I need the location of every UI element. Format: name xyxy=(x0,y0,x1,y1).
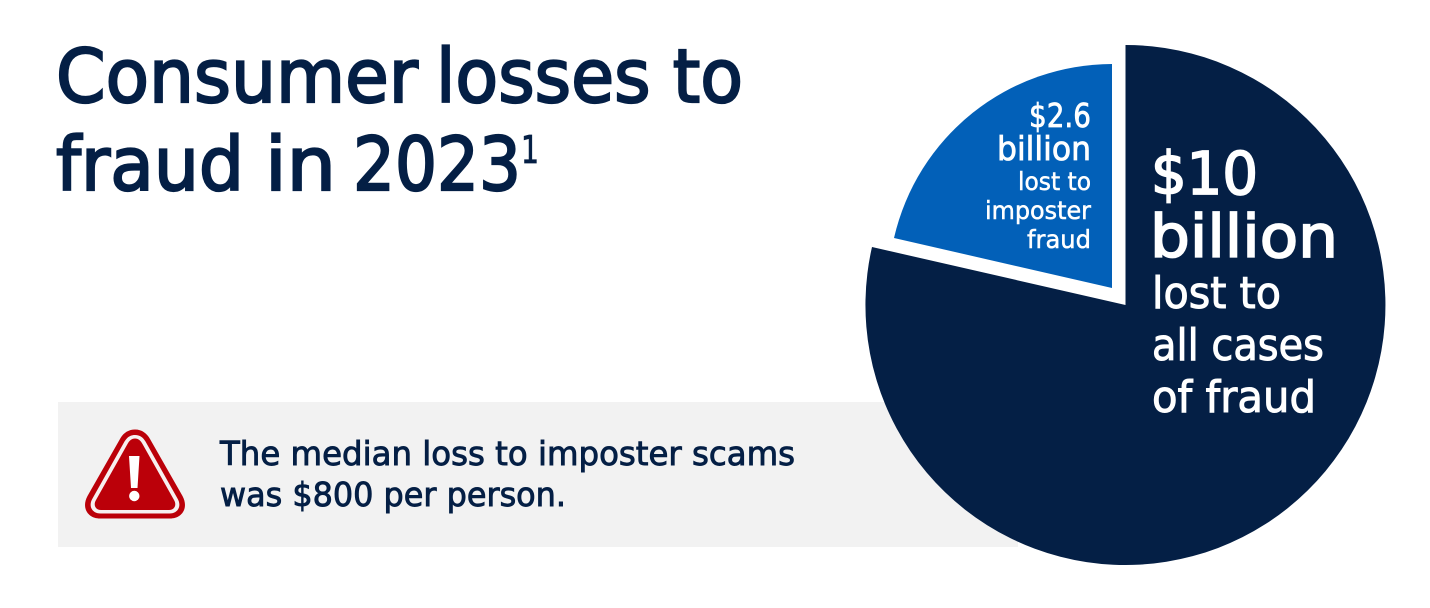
pie slice: imposter fraud xyxy=(894,64,1112,288)
label: all fraud: lost to xyxy=(1152,268,1281,319)
title xyxy=(56,34,743,208)
label: imposter fraud: billion xyxy=(997,129,1091,168)
label: all fraud: $10 xyxy=(1151,139,1258,208)
title: losses to xyxy=(436,34,743,120)
panel: median loss callout xyxy=(58,402,1018,547)
callout text: was $800 per person. xyxy=(220,475,566,514)
label: all fraud: billion xyxy=(1150,202,1338,271)
label: imposter fraud: imposter xyxy=(985,196,1092,225)
label: imposter fraud xyxy=(985,96,1092,254)
callout text xyxy=(219,434,795,514)
label: all fraud: all cases xyxy=(1152,320,1324,371)
label: all fraud: of fraud xyxy=(1152,372,1316,423)
title: 2023 xyxy=(353,122,521,208)
title: in xyxy=(265,122,336,208)
label: all fraud xyxy=(1150,139,1338,423)
pie slice: all fraud xyxy=(865,45,1385,565)
callout text: The median loss to imposter scams xyxy=(219,434,795,473)
label: imposter fraud: fraud xyxy=(1027,225,1091,254)
title: fraud xyxy=(56,122,244,208)
label: imposter fraud: lost to xyxy=(1018,167,1091,196)
title: 1 xyxy=(521,128,539,172)
icon: warning triangle xyxy=(85,430,185,518)
pie chart xyxy=(865,45,1385,565)
label: imposter fraud: $2.6 xyxy=(1029,96,1091,135)
title: Consumer xyxy=(56,34,419,120)
